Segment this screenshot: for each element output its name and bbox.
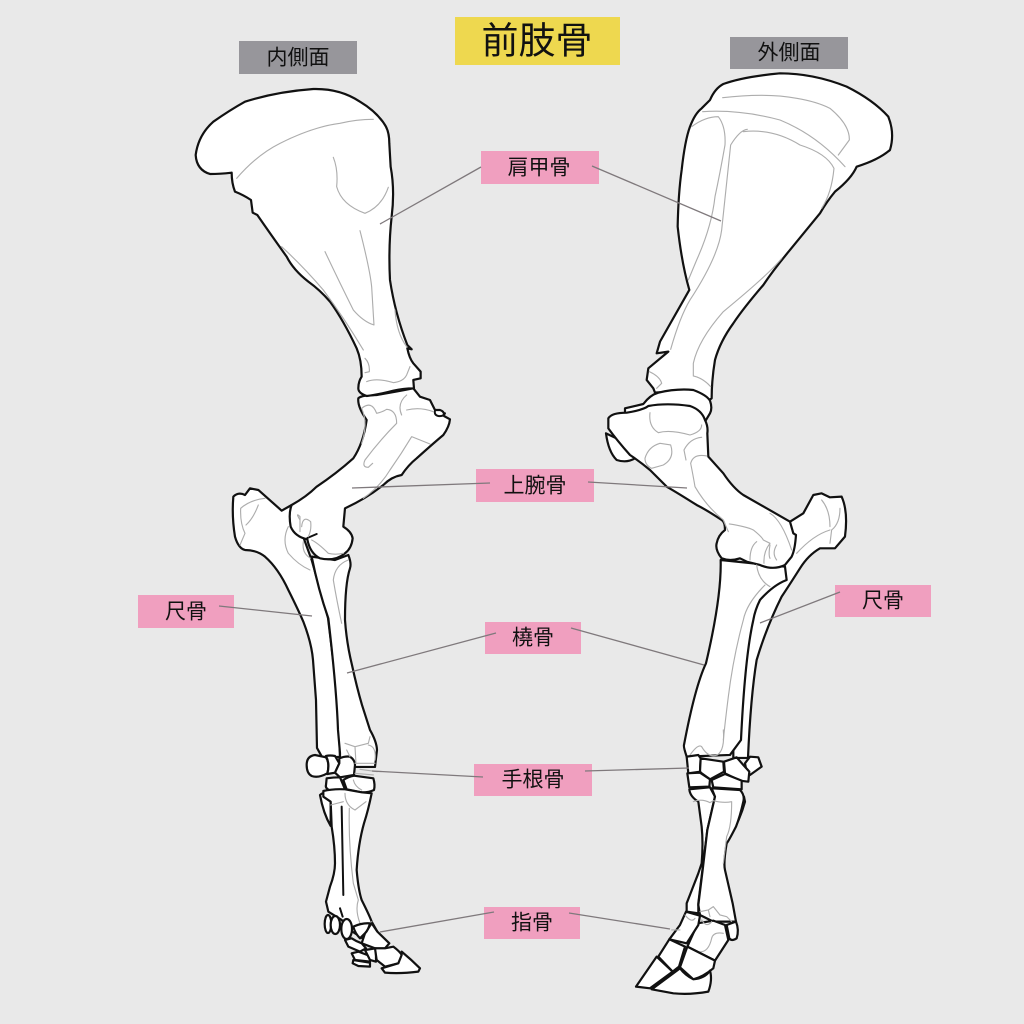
- label: lateral side: [730, 37, 848, 69]
- right phalanges and hooves: [636, 912, 738, 994]
- left digit bones and hoof: [325, 915, 420, 973]
- label: medial side: 内側面: [266, 46, 330, 70]
- label: medial side: [239, 41, 357, 74]
- label: lateral side: 外側面: [758, 42, 820, 64]
- label: ulna right: 尺骨: [862, 590, 904, 612]
- label: radius: [485, 622, 581, 654]
- label: carpals: [474, 764, 592, 796]
- left humerus: [290, 388, 450, 559]
- left metacarpal: [320, 789, 377, 943]
- right ulna: [733, 493, 846, 758]
- right radius: [684, 560, 787, 757]
- left scapula: [196, 89, 421, 396]
- label: scapula: [481, 151, 599, 184]
- right humerus: [606, 390, 796, 587]
- left ulna: [233, 488, 340, 757]
- right limb: lateral view: [606, 73, 892, 994]
- right metacarpals: [687, 787, 745, 922]
- label: ulna left: 尺骨: [165, 600, 207, 624]
- label: humerus: [476, 469, 594, 502]
- title: 前肢骨: [482, 20, 592, 62]
- right carpals and sesamoid: [687, 730, 762, 789]
- label: ulna right: [835, 585, 931, 617]
- right scapula: [647, 73, 892, 401]
- label: scapula: 肩甲骨: [508, 156, 570, 180]
- label: phalanges: [484, 907, 580, 939]
- label: radius: 橈骨: [512, 626, 554, 650]
- label: ulna left: [138, 595, 234, 628]
- left radius: [312, 555, 377, 767]
- leader lines: [219, 166, 840, 932]
- left carpals: [307, 737, 377, 792]
- label: humerus: 上腕骨: [504, 474, 566, 498]
- label: phalanges: 指骨: [511, 912, 553, 934]
- left limb: medial view: [196, 89, 450, 973]
- label: carpals: 手根骨: [502, 768, 564, 792]
- title: [455, 17, 620, 65]
